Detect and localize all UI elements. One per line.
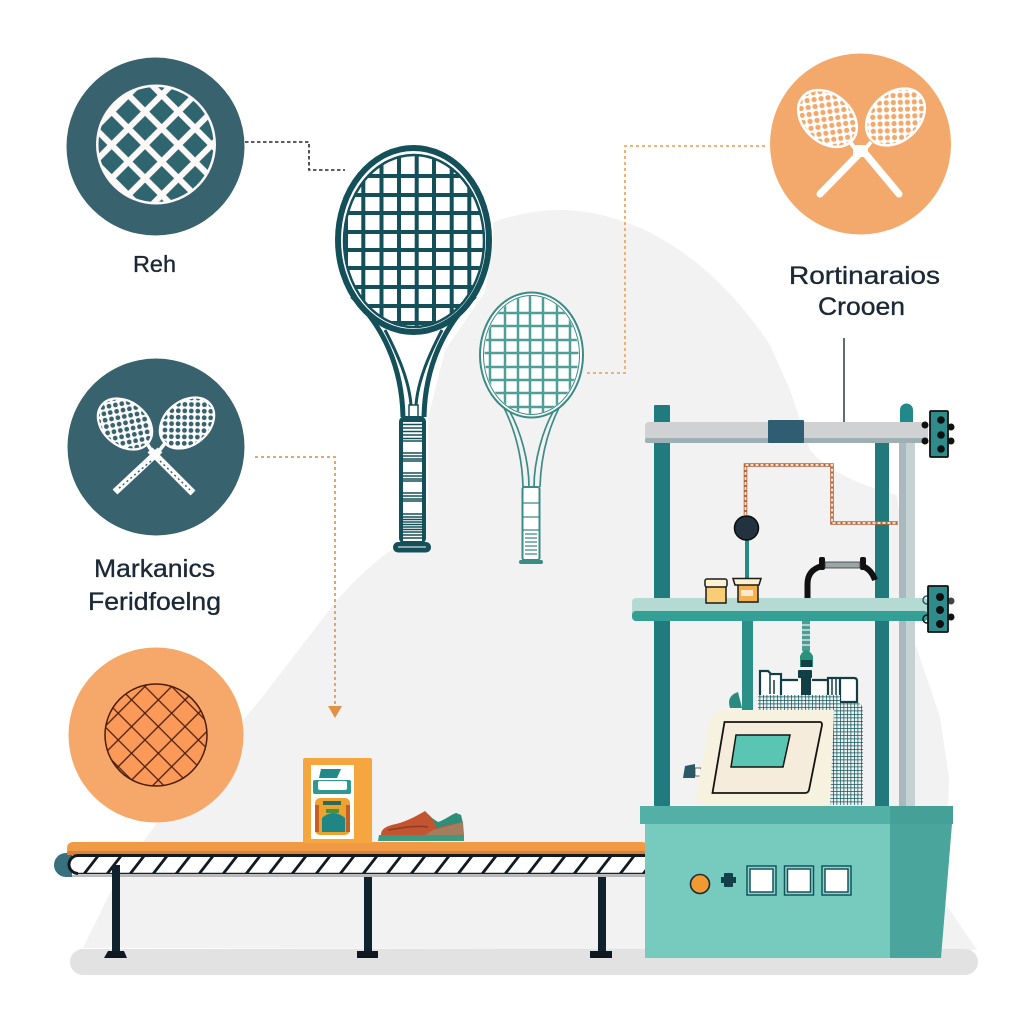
- top clamp: [922, 411, 954, 457]
- leader line to machine: [843, 338, 845, 422]
- black arch handle: [808, 557, 875, 598]
- conveyor belt: [54, 842, 657, 877]
- jar left: [705, 579, 727, 603]
- shelf clamp: [923, 586, 954, 632]
- label: Markanics Feridfoelng: Markanics: [94, 555, 215, 583]
- label: Markanics Feridfoelng: Feridfoelng: [88, 588, 221, 616]
- label: Rortinaraios Crooen: Rortinaraios: [789, 262, 940, 290]
- label: Rortinaraios Crooen: [789, 262, 940, 321]
- top bar: [645, 422, 928, 443]
- jar right: [733, 578, 761, 602]
- conveyor legs: [104, 865, 612, 958]
- sneaker: [378, 811, 464, 841]
- connector: top-right orange dashed: [585, 146, 765, 373]
- floor shadow: [70, 949, 978, 975]
- large racket: [338, 148, 490, 552]
- connector: orange arrow to conveyor: [255, 457, 342, 718]
- connector: top-left black dashed: [245, 142, 345, 170]
- background blob: [83, 210, 977, 950]
- right post: [875, 443, 889, 806]
- chain and bulb: [800, 621, 813, 667]
- icon circle: orange net: [68, 648, 244, 822]
- icon circle: crossed rackets teal: [68, 358, 244, 536]
- square buttons: [747, 866, 851, 895]
- left post: [654, 405, 670, 806]
- label: Reh: Reh: [133, 251, 176, 277]
- small racket: [480, 292, 585, 564]
- orange dashed wiring: [746, 465, 898, 523]
- icon circle: mesh: [66, 58, 244, 236]
- icon circle: crossed rackets orange: [770, 54, 951, 234]
- small icon: [721, 873, 736, 887]
- back grey post: [899, 443, 915, 806]
- machine base: [640, 806, 953, 958]
- button: [690, 874, 710, 894]
- roller: [54, 853, 72, 877]
- machine frame: [632, 404, 928, 806]
- control panel: [683, 710, 834, 806]
- panel knob: [683, 764, 701, 778]
- shelf: [632, 598, 928, 621]
- mechanism: [729, 670, 863, 805]
- label: Markanics Feridfoelng: [88, 555, 221, 616]
- label: Rortinaraios Crooen: Crooen: [818, 293, 905, 321]
- product box: [303, 758, 372, 843]
- middle post: [742, 621, 753, 711]
- gauge ball and stem: [734, 516, 758, 578]
